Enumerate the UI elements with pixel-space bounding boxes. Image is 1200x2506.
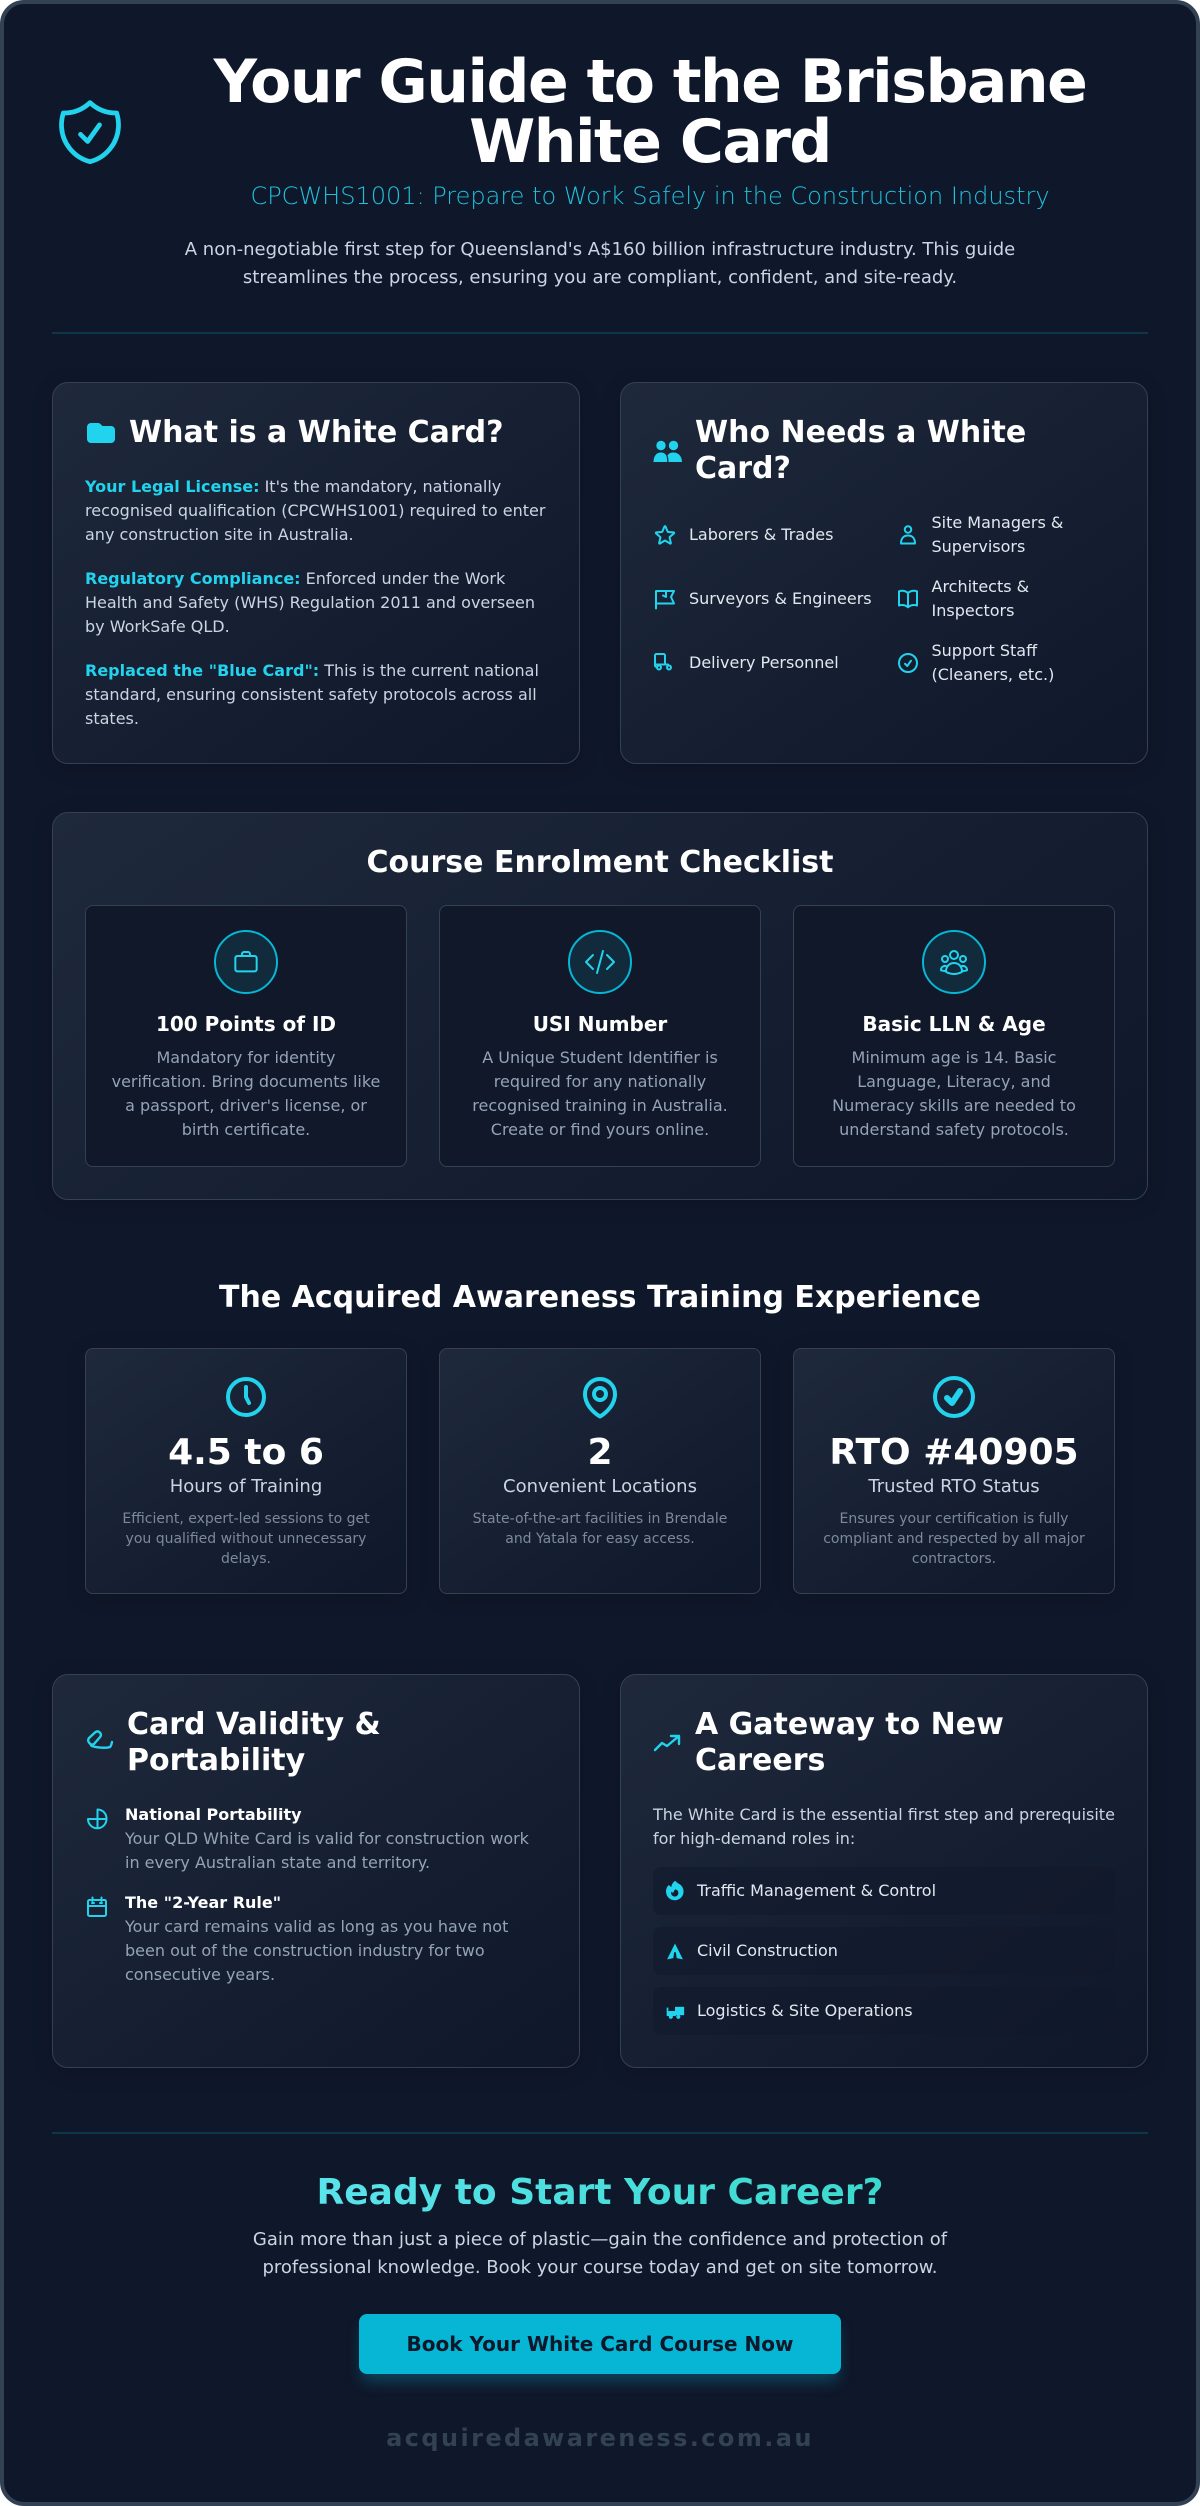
- card text: a passport, driver's license, or: [125, 1096, 367, 1115]
- stat value: 4.5 to 6: [168, 1432, 324, 1473]
- intro text: streamlines the process, ensuring you are compliant, confident, and site-ready.: [243, 267, 957, 288]
- role: site managers: [900, 513, 1063, 556]
- icon: user group: [922, 930, 986, 994]
- heading: training experience: The Acquired Awareness Training Experience: [219, 1280, 981, 1315]
- heading: what is a white card: What is a White Card?: [129, 415, 504, 450]
- heading: gateway: Careers: [695, 1743, 825, 1778]
- stat label: Trusted RTO Status: [868, 1476, 1040, 1497]
- text block: definitions: recognised qualification (CPCWHS1001) required to enter: [85, 501, 545, 520]
- heading: card validity: Portability: [127, 1743, 305, 1778]
- card title: USI Number: [533, 1012, 667, 1036]
- stat description: [122, 1511, 370, 1567]
- card text: recognised training in Australia.: [472, 1096, 728, 1115]
- item: national portability: National Portability: [125, 1805, 302, 1824]
- role: site managers: Site Managers &: [932, 513, 1063, 532]
- icon: check badge: [933, 1376, 975, 1418]
- item: two year rule: The "2-Year Rule": [125, 1893, 281, 1912]
- subtitle: CPCWHS1001: Prepare to Work Safely in the Construction Industry: [250, 182, 1050, 210]
- item: two year rule: been out of the construction industry for two: [125, 1941, 485, 1960]
- card title: 100 Points of ID: [156, 1012, 336, 1036]
- stat value: 2: [587, 1432, 613, 1473]
- role: surveyors and engineers: Surveyors & Engineers: [689, 589, 872, 608]
- stat card: locations: [439, 1348, 761, 1594]
- item: national portability: Your QLD White Card is valid for construction work: [125, 1829, 529, 1848]
- stat description: and Yatala for easy access.: [505, 1531, 695, 1547]
- stat description: delays.: [221, 1551, 271, 1567]
- item: two year rule: [87, 1893, 508, 1984]
- card text: A Unique Student Identifier is: [482, 1048, 718, 1067]
- card text: [472, 1048, 728, 1139]
- stat description: [823, 1511, 1085, 1567]
- card text: [112, 1048, 380, 1139]
- role pill: civil construction: Civil Construction: [697, 1941, 838, 1960]
- call to action heading: [52, 2173, 1148, 2213]
- role pill: traffic management: [653, 1867, 1115, 1915]
- text block: definitions: Replaced the "Blue Card": This is the current national: [85, 661, 539, 680]
- role pill: civil construction: [653, 1927, 1115, 1975]
- item: two year rule: Your card remains valid as long as you have not: [125, 1917, 508, 1936]
- icon: shield check: [59, 100, 121, 164]
- card text: birth certificate.: [182, 1120, 310, 1139]
- text block: gateway intro: The White Card is the essential first step and prerequisite: [653, 1805, 1115, 1824]
- card text: understand safety protocols.: [839, 1120, 1069, 1139]
- card text: Mandatory for identity: [156, 1048, 336, 1067]
- role: architects and inspectors: Architects &: [932, 577, 1029, 596]
- intro text: [184, 239, 1015, 288]
- call to action text: professional knowledge. Book your course today and get on site tomorrow.: [262, 2257, 938, 2278]
- icon: code: [568, 930, 632, 994]
- role: delivery personnel: Delivery Personnel: [689, 653, 839, 672]
- call to action text: [253, 2229, 948, 2278]
- panel: course enrolment checklist: [52, 812, 1148, 1200]
- heading: course enrolment checklist: Course Enrolment Checklist: [367, 845, 833, 880]
- heading: card validity: Card Validity &: [127, 1707, 381, 1742]
- checklist card: 100 points of id: [85, 905, 407, 1167]
- heading: card validity: [87, 1707, 381, 1778]
- text block: definitions: any construction site in Australia.: [85, 525, 354, 544]
- call to action text: Gain more than just a piece of plastic—gain the confidence and protection of: [253, 2229, 947, 2250]
- role: support staff: Support Staff: [932, 641, 1037, 660]
- heading: gateway: A Gateway to New: [695, 1707, 1004, 1742]
- item: national portability: in every Australian state and territory.: [125, 1853, 430, 1872]
- card text: verification. Bring documents like: [112, 1072, 380, 1091]
- text block: gateway intro: [652, 1805, 1115, 1848]
- icon: map pin: [583, 1377, 617, 1418]
- role: site managers: Supervisors: [932, 537, 1025, 556]
- card text: Numeracy skills are needed to: [832, 1096, 1076, 1115]
- role: support staff: [898, 641, 1054, 684]
- text block: gateway intro: for high-demand roles in:: [653, 1829, 855, 1848]
- stat card: rto status: [793, 1348, 1115, 1594]
- card text: Minimum age is 14. Basic: [852, 1048, 1056, 1067]
- stat description: contractors.: [912, 1551, 996, 1567]
- stat description: compliant and respected by all major: [823, 1531, 1085, 1547]
- card text: [832, 1048, 1076, 1139]
- card text: required for any nationally: [494, 1072, 706, 1091]
- stat label: Hours of Training: [170, 1476, 322, 1497]
- stat description: you qualified without unnecessary: [126, 1531, 366, 1547]
- role pill: logistics: [653, 1987, 1115, 2035]
- role: support staff: (Cleaners, etc.): [932, 665, 1054, 684]
- role pill: logistics: Logistics & Site Operations: [697, 2001, 913, 2020]
- checklist card: usi number: [439, 905, 761, 1167]
- title: Your Guide to the Brisbane: [214, 47, 1086, 117]
- heading: who needs a white card: Who Needs a White: [695, 415, 1026, 450]
- stat label: Convenient Locations: [503, 1476, 697, 1497]
- text block: definitions: Regulatory Compliance: Enforced under the Work: [85, 569, 505, 588]
- card text: Language, Literacy, and: [857, 1072, 1051, 1091]
- checklist card: basic lln and age: [793, 905, 1115, 1167]
- button: book course: Book Your White Card Course Now: [407, 2332, 793, 2356]
- stat description: Ensures your certification is fully: [840, 1511, 1068, 1527]
- item: national portability: [87, 1805, 529, 1872]
- role: architects and inspectors: Inspectors: [932, 601, 1014, 620]
- heading: who needs a white card: Card?: [695, 451, 791, 486]
- stat description: State-of-the-art facilities in Brendale: [473, 1511, 727, 1527]
- role: architects and inspectors: [898, 577, 1029, 620]
- heading: who needs a white card: [654, 415, 1026, 486]
- panel: card validity and portability: [52, 1674, 580, 2068]
- icon: briefcase: [214, 930, 278, 994]
- list: roles: [654, 513, 1063, 684]
- website url: acquiredawareness.com.au: [386, 2424, 814, 2452]
- item: two year rule: consecutive years.: [125, 1965, 275, 1984]
- text block: definitions: by WorkSafe QLD.: [85, 617, 230, 636]
- stat card: hours of training: [85, 1348, 407, 1594]
- card text: Create or find yours online.: [491, 1120, 709, 1139]
- panel: what is a white card: [52, 382, 580, 764]
- panel: who needs a white card: [620, 382, 1148, 764]
- stat description: [473, 1511, 727, 1547]
- text block: definitions: standard, ensuring consistent safety protocols across all: [85, 685, 537, 704]
- stat value: RTO #40905: [829, 1432, 1079, 1473]
- text block: definitions: states.: [85, 709, 139, 728]
- call to action heading: Ready to Start Your Career?: [317, 2172, 883, 2213]
- intro text: A non-negotiable first step for Queensland's A$160 billion infrastructure industry. This guide: [185, 239, 1015, 260]
- title: [213, 47, 1086, 177]
- role pill: traffic management: Traffic Management & Control: [697, 1881, 936, 1900]
- button: book course: [359, 2314, 841, 2374]
- stat description: Efficient, expert-led sessions to get: [122, 1511, 370, 1527]
- icon: clock: [226, 1377, 266, 1417]
- text block: definitions: [84, 477, 546, 728]
- heading: gateway: [654, 1707, 1004, 1778]
- title: White Card: [469, 107, 831, 177]
- text block: definitions: Health and Safety (WHS) Regulation 2011 and overseen: [85, 593, 535, 612]
- panel: a gateway to new careers: [620, 1674, 1148, 2068]
- card title: Basic LLN & Age: [862, 1012, 1046, 1036]
- role: laborers and trades: Laborers & Trades: [689, 525, 833, 544]
- text block: definitions: Your Legal License: It's the mandatory, nationally: [85, 477, 501, 496]
